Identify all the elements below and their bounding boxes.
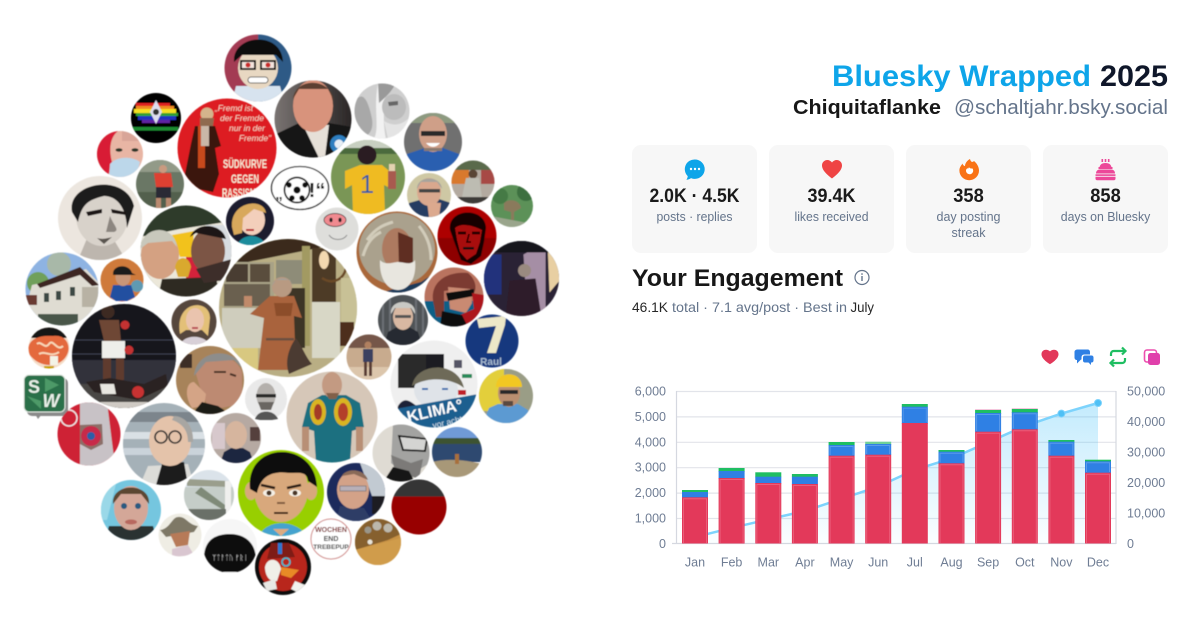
stacked bar: Jul — [902, 404, 928, 544]
left axis labels: 0 — [659, 537, 666, 551]
right axis labels: 20,000 — [1127, 476, 1165, 490]
avatar: man with yellow helmet — [479, 369, 533, 423]
right axis labels: 0 — [1127, 537, 1134, 551]
avatar: lake landscape — [432, 427, 482, 477]
avatar: cowboy hat illustration — [158, 513, 202, 557]
panel: likes received stat — [769, 145, 894, 253]
panel: day posting streak stat: streak — [952, 226, 986, 240]
profile name and handle: @schaltjahr.bsky.social — [954, 97, 1168, 119]
engagement summary: total · 7.1 avg/post · Best in — [672, 299, 847, 315]
avatar: bald man in room — [211, 413, 261, 463]
avatar: red Suedkurve poster: SÜDKURVE — [223, 158, 267, 171]
heading: Your Engagement: Your Engagement — [632, 265, 843, 292]
stacked bar: Mar — [755, 472, 781, 544]
avatar: cartoon boy on green — [238, 450, 324, 536]
avatar: Scrooge McDuck on red — [255, 539, 311, 595]
avatar: boy in vintage sepia photo — [346, 334, 392, 380]
left axis labels — [635, 384, 666, 551]
avatar: glass building structure — [184, 470, 234, 520]
panel: likes received stat: 39.4K — [808, 186, 856, 207]
avatar: red haired person with mask — [97, 131, 144, 177]
panel: posts and replies stat: posts · replies — [656, 210, 732, 224]
avatar: red Suedkurve poster: der Fremde — [220, 113, 264, 123]
avatar: Klima vor acht profile: KLIMA° — [405, 397, 465, 426]
avatar: SW green logo speech box: S — [28, 377, 40, 397]
avatar: boxing photo Ali standing over opponent — [72, 304, 176, 410]
avatar: Captain Harlock comic — [424, 267, 484, 327]
panel: days on Bluesky stat — [1043, 145, 1168, 253]
cumulative area — [695, 403, 1098, 544]
avatar: red Suedkurve poster: GEGEN — [231, 174, 259, 186]
avatar: person seated at orange wall — [451, 160, 495, 205]
month labels: Jul — [907, 556, 923, 570]
avatar: man sleeping on hand — [176, 346, 244, 414]
avatar: man with glasses in car — [327, 463, 386, 521]
avatar: blue jersey number 7 — [465, 314, 519, 368]
avatar: guitar headstock — [355, 519, 401, 565]
engagement summary: 46.1K — [632, 299, 669, 315]
avatar: Wochenend badge: WOCHEN — [315, 527, 347, 534]
avatar: fan in red shirt at stadium — [136, 160, 184, 209]
profile name and handle — [793, 97, 1168, 119]
avatar: grey haired man with glasses — [378, 295, 428, 345]
avatar: red stencil face — [437, 206, 497, 266]
title: Bluesky Wrapped — [832, 60, 1091, 93]
month labels: Aug — [940, 556, 963, 570]
icon: birthday cake — [1096, 159, 1116, 180]
month labels: Sep — [977, 556, 999, 570]
avatar: pig drawing — [316, 208, 358, 250]
icon: replies chat — [1074, 350, 1094, 365]
avatar: cartoon man with glasses — [224, 34, 292, 102]
month labels: Mar — [758, 556, 779, 570]
avatar: SW green logo speech box — [24, 375, 68, 419]
avatar: man resting chin on hand — [407, 173, 451, 217]
avatar: black and white portrait — [58, 176, 142, 260]
month labels: Apr — [795, 556, 815, 570]
avatar: bald man in greyscale — [245, 378, 287, 420]
cumulative line — [695, 403, 1098, 537]
avatar: Wochenend badge — [311, 519, 351, 559]
avatar: blue jersey number 7: Raul — [480, 357, 502, 368]
stacked bar: Dec — [1085, 460, 1111, 544]
avatar: cartoon blonde woman — [226, 197, 274, 245]
avatar: close-up face on blue — [101, 480, 161, 540]
panel: day posting streak stat: 358 — [953, 186, 984, 207]
panel: avatar bubble cluster — [24, 34, 560, 595]
icon: heart — [822, 160, 842, 178]
avatar: Wochenend badge: TREBEPUP — [313, 544, 349, 551]
left axis labels: 2,000 — [635, 486, 666, 500]
engagement summary: July — [850, 299, 874, 315]
avatar: white house under blue sky — [25, 252, 99, 326]
month labels: May — [830, 556, 854, 570]
panel: days on Bluesky stat: 858 — [1090, 186, 1121, 207]
right axis labels — [1127, 384, 1165, 551]
month labels: Jun — [868, 556, 888, 570]
stacked bar: May — [829, 442, 855, 544]
avatar: black and dark red flag — [391, 479, 447, 536]
avatar: Klima vor acht profile — [390, 340, 478, 430]
icon: info — [855, 270, 869, 284]
avatar: football speech bubble: „ — [275, 186, 283, 203]
panel: likes received stat: likes received — [794, 210, 869, 224]
stacked bar: Sep — [975, 409, 1001, 544]
left axis labels: 5,000 — [635, 410, 666, 424]
stacked bar: Aug — [938, 450, 964, 544]
avatar: football speech bubble: !“ — [309, 180, 325, 202]
chart: monthly engagement bars and cumulative line — [635, 384, 1165, 570]
right axis labels: 10,000 — [1127, 506, 1165, 520]
title: 2025 — [1100, 60, 1168, 93]
avatar: black beanie: ᛉᛏᚨᛏᚢ ᚠᚱᛁ — [212, 554, 248, 562]
left axis labels: 1,000 — [635, 512, 666, 526]
avatar: Wochenend badge: END — [324, 536, 338, 543]
avatar: green park with sculpture — [491, 183, 535, 227]
profile name and handle: Chiquitaflanke — [793, 97, 941, 119]
line end markers — [1058, 400, 1102, 417]
stacked bar: Oct — [1012, 408, 1038, 544]
right axis labels: 40,000 — [1127, 415, 1165, 429]
icon: likes heart — [1042, 350, 1058, 364]
panel: days on Bluesky stat: days on Bluesky — [1061, 210, 1151, 224]
month labels: Dec — [1087, 556, 1109, 570]
avatar: two men with golden trophy — [140, 205, 232, 297]
panel: posts and replies stat — [632, 145, 757, 253]
right axis labels: 50,000 — [1127, 384, 1165, 398]
avatar: older man with round glasses — [123, 403, 205, 485]
month labels — [685, 556, 1109, 570]
avatar: red Suedkurve poster: RASSISM — [222, 188, 256, 200]
avatar: SW green logo speech box: W — [42, 391, 62, 411]
panel: posts and replies stat: 2.0K · 4.5K — [650, 186, 740, 207]
avatar: blonde doll — [171, 299, 217, 345]
left axis labels: 4,000 — [635, 436, 666, 450]
panel: day posting streak stat — [906, 145, 1031, 253]
stacked bar: Nov — [1048, 440, 1074, 544]
icon: reposts arrows — [1110, 348, 1126, 366]
chart legend icons — [1042, 348, 1160, 366]
right axis labels: 30,000 — [1127, 446, 1165, 460]
month labels: Jan — [685, 556, 705, 570]
avatar: Klima vor acht profile: vor acht — [431, 414, 464, 430]
month labels: Feb — [721, 556, 742, 570]
avatar: red Suedkurve poster: Fremde" — [239, 133, 272, 143]
left axis labels: 3,000 — [635, 460, 666, 474]
avatar: red Suedkurve poster: „Fremd ist — [214, 103, 254, 113]
avatar: red Suedkurve poster: nur in der — [229, 123, 266, 133]
icon: chat bubble — [685, 159, 705, 180]
avatar: man in dark room with blue light — [484, 240, 560, 316]
panel: day posting streak stat: day posting — [936, 210, 1001, 224]
avatar: Bayern badge on red and white jersey — [57, 402, 121, 466]
avatar: red brain with VfB badge — [28, 327, 70, 369]
avatar: man in orange scene with cap — [100, 258, 144, 302]
avatar: football speech bubble — [271, 159, 329, 217]
avatar: red Suedkurve poster — [177, 98, 277, 200]
stacked bar: Jan — [682, 490, 708, 544]
left axis labels: 6,000 — [635, 384, 666, 398]
icon: quotes squares — [1144, 350, 1160, 365]
avatar: large photo of person in brown robe — [218, 238, 361, 378]
avatar: yellow jersey from behind — [331, 140, 405, 214]
icon: flame — [959, 159, 979, 180]
stacked bar: Jun — [865, 442, 891, 544]
avatar: man in teal shirt with yellow patches — [286, 371, 378, 463]
stacked bar: Apr — [792, 474, 818, 544]
avatar: smiling bald man with glasses — [404, 113, 462, 171]
avatar: Borussia rainbow logo — [131, 93, 181, 143]
avatar: man with long white hair and beard — [356, 211, 438, 293]
avatar: black beanie — [203, 519, 257, 573]
avatar: black and white man with glasses — [372, 424, 430, 482]
avatar: yellow jersey from behind: 1 — [360, 169, 374, 199]
stacked bar: Feb — [719, 468, 745, 544]
avatar: grey blonde woman — [354, 83, 410, 139]
avatar: man in suit with Schalke badge — [274, 80, 352, 158]
month labels: Oct — [1015, 556, 1035, 570]
month labels: Nov — [1050, 556, 1073, 570]
